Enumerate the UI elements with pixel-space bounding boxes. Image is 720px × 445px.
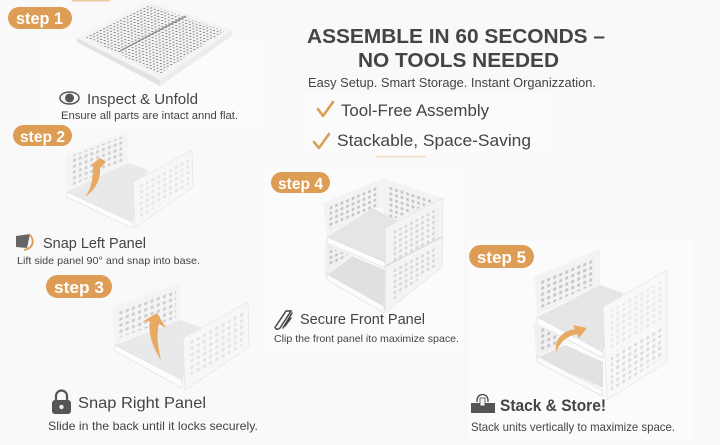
illustration: stacked unit — [534, 249, 667, 400]
heading: assemble in 60 seconds: ASSEMBLE IN 60 SECONDS – — [307, 26, 605, 48]
badge: step 5 — [469, 245, 534, 268]
icon: snap panel — [16, 234, 33, 250]
feature: tool-free assembly: Tool-Free Assembly — [341, 101, 489, 120]
badge: step 4 — [271, 172, 330, 193]
illustration: flat folded base — [77, 1, 232, 86]
badge: step 2: step 2 — [20, 129, 65, 146]
heading: assemble in 60 seconds — [307, 26, 605, 72]
illustration: two-tier unit — [323, 178, 443, 313]
step 1 title: Inspect & Unfold — [87, 92, 198, 108]
badge: step 3: step 3 — [54, 278, 104, 297]
badge: step 1: step 1 — [16, 9, 63, 28]
step 3 title: Snap Right Panel — [78, 395, 206, 412]
badge: step 3 — [46, 275, 112, 298]
icon: paper clip — [275, 311, 292, 329]
step 2 title: Snap Left Panel — [43, 236, 146, 252]
panel: step 3 — [46, 275, 258, 433]
badge: step 5: step 5 — [477, 248, 526, 267]
badge: step 2 — [13, 125, 72, 146]
subheading: Easy Setup. Smart Storage. Instant Organizzation. — [308, 76, 596, 90]
step 4 description: Clip the front panel ito maximize space. — [274, 333, 459, 345]
icon: lock — [52, 390, 71, 414]
panel: step 4 — [271, 172, 459, 345]
arrow: lift up — [85, 158, 106, 197]
badge: step 1 — [8, 7, 72, 29]
panel: step 5 — [469, 245, 675, 434]
feature: stackable, space-saving: Stackable, Space-Saving — [337, 131, 531, 150]
panel: step 1 — [8, 1, 238, 122]
icon: storage bag — [471, 394, 495, 413]
arrow: stack — [556, 325, 587, 352]
step 1 description: Ensure all parts are intact annd flat. — [61, 110, 238, 122]
illustration: right panel snapped — [112, 282, 249, 390]
step 3 description: Slide in the back until it locks securely. — [48, 419, 258, 433]
arrow: slide in — [142, 313, 166, 360]
step 2 description: Lift side panel 90° and snap into base. — [17, 255, 200, 267]
step 5 description: Stack units vertically to maximize space. — [471, 420, 675, 434]
heading: assemble in 60 seconds: NO TOOLS NEEDED — [358, 50, 559, 72]
illustration: left panel snapped — [66, 132, 193, 228]
icon: eye — [60, 92, 79, 104]
step 5 title: Stack & Store! — [500, 397, 606, 415]
panel: step 2 — [13, 125, 200, 267]
step 4 title: Secure Front Panel — [300, 312, 425, 328]
badge: step 4: step 4 — [278, 176, 323, 193]
